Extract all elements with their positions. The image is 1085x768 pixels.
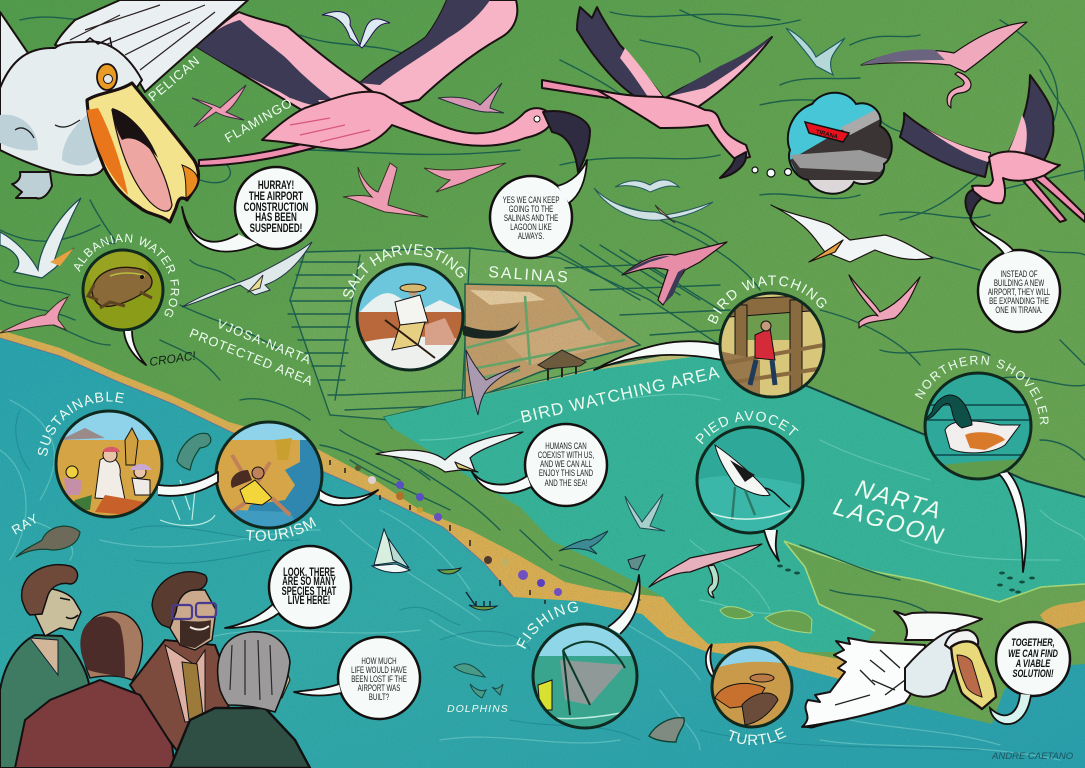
bubble: instead of xyxy=(970,218,1060,332)
frog circle xyxy=(82,248,164,332)
signature: ANDRE CAETANO xyxy=(991,751,1074,762)
label: salt harvesting: SALT HARVESTING xyxy=(343,244,466,298)
fishing circle xyxy=(530,620,640,731)
bubble: hurray: SUSPENDED! xyxy=(250,223,302,235)
label: dolphins: DOLPHINS xyxy=(447,703,509,715)
bubble: how much life: HOW MUCH xyxy=(361,656,397,666)
label: bird watching: BIRD WATCHING xyxy=(708,276,826,324)
tourism circle xyxy=(215,420,325,530)
tourism connector xyxy=(320,490,378,505)
flamingo right wing xyxy=(360,0,517,105)
man from behind xyxy=(15,612,175,768)
gull centre left xyxy=(182,242,312,307)
label: vjosa-narta protected area: VJOSA-NARTA xyxy=(215,316,314,368)
gull left xyxy=(0,198,81,278)
bubble: instead of: ONE IN TIRANA. xyxy=(995,305,1043,315)
label: croac: CROAC! xyxy=(148,349,197,369)
pelican crest xyxy=(85,38,112,48)
pied avocet circle xyxy=(695,425,805,535)
turtle circle xyxy=(710,645,795,730)
big flamingo xyxy=(197,0,590,172)
label: turtle: TURTLE xyxy=(730,727,786,745)
bubble: how much life: BUILT? xyxy=(369,692,390,702)
pink flamingo right lower xyxy=(849,275,920,328)
small blue gull xyxy=(786,28,845,75)
sailboat xyxy=(372,529,410,573)
bubble: how much life: BEEN LOST IF THE xyxy=(351,674,407,684)
frog speech tail xyxy=(124,331,146,365)
net near fishing xyxy=(628,555,645,570)
pelican feet xyxy=(12,172,52,198)
pelican body xyxy=(905,630,969,697)
blue bird xyxy=(559,531,608,554)
flamingo left wing xyxy=(197,12,395,120)
label: sustainable: SUSTAINABLE xyxy=(38,392,124,456)
right flamingo xyxy=(900,75,1085,222)
bubble: yes we can: SALINAS AND THE xyxy=(504,213,558,223)
bubble: hurray: HURRAY! xyxy=(258,180,294,192)
grey haired woman xyxy=(170,632,310,768)
northern shoveler circle xyxy=(925,373,1031,485)
salt harvesting circle xyxy=(355,262,465,372)
bird watching circle xyxy=(715,290,830,400)
jumping dolphin with splash xyxy=(160,433,215,525)
bubble: instead of: AIRPORT, THEY WILL xyxy=(988,287,1051,297)
bubble: hurray: CONSTRUCTION xyxy=(244,202,308,214)
bubble: look there are: ARE SO MANY xyxy=(282,576,336,589)
sea xyxy=(0,338,1085,768)
bubble: look there are: LOOK, THERE xyxy=(283,567,335,580)
label: northern shoveler: NORTHERN SHOVELER xyxy=(914,356,1048,425)
thought dots xyxy=(752,167,792,177)
bubble: humans can coexist xyxy=(472,424,607,506)
small pink flamingos xyxy=(0,83,506,333)
narta lagoon xyxy=(384,353,1085,652)
airport sign: TIRANA xyxy=(815,129,839,141)
sea ripples xyxy=(0,394,1085,760)
land contour lines xyxy=(0,10,1085,460)
ray xyxy=(16,526,80,557)
pelican head xyxy=(945,630,978,652)
pink flamingo top right xyxy=(861,22,1027,108)
lower pelican xyxy=(802,611,996,728)
bubble: humans can coexist: AND THE SEA! xyxy=(545,478,587,488)
glasses xyxy=(172,603,216,619)
salt fields xyxy=(288,245,730,420)
bubble: how much life: LIFE WOULD HAVE xyxy=(351,665,407,675)
light pelicans xyxy=(594,180,713,223)
salt shed xyxy=(538,350,586,388)
bubble: instead of: INSTEAD OF xyxy=(1000,269,1038,279)
people group xyxy=(0,565,310,768)
bubble: together: WE CAN FIND xyxy=(1008,646,1058,659)
dolphin group xyxy=(454,664,503,698)
causeway xyxy=(384,344,724,428)
bird watching connector xyxy=(594,341,722,370)
flamingo bill xyxy=(543,111,590,172)
shoveler speech tail xyxy=(999,472,1026,572)
sustainable circle xyxy=(55,410,165,520)
salinas flamingo xyxy=(466,350,520,415)
salt pans xyxy=(465,284,640,402)
label: narta lagoon: LAGOON xyxy=(830,493,948,551)
flying pelican over lagoon xyxy=(376,432,523,472)
white pelican centre right xyxy=(771,205,933,262)
flamingo legs xyxy=(199,140,320,166)
dark sea swirls xyxy=(16,410,980,750)
inner land lines xyxy=(320,430,940,620)
label: ray: RAY xyxy=(9,510,41,538)
fishing connector xyxy=(608,575,640,634)
label: vjosa-narta protected area: PROTECTED AREA xyxy=(187,325,316,389)
bubble: together: A VIABLE xyxy=(1015,656,1051,669)
gull over lagoon xyxy=(625,494,665,531)
pelican lower wing xyxy=(802,638,925,727)
bubble: hurray: HAS BEEN xyxy=(255,212,297,224)
pelican wings xyxy=(55,0,248,92)
bubble: hurray: THE AIRPORT xyxy=(249,191,303,203)
pelican bill xyxy=(951,641,996,709)
salt harvesting connector xyxy=(463,320,520,339)
bubble: together: TOGETHER, xyxy=(1011,635,1055,648)
bearded man xyxy=(130,572,232,768)
bubble: humans can coexist: AND WE CAN ALL xyxy=(540,459,592,469)
bubble: together: SOLUTION! xyxy=(1012,666,1054,679)
bubble: together xyxy=(990,622,1070,724)
label: albanian water frog: ALBANIAN WATER FROG xyxy=(74,234,180,318)
bubble: look there are: LIVE HERE! xyxy=(288,595,330,608)
bubble: humans can coexist: COEXIST WITH US, xyxy=(538,450,594,460)
beach strip xyxy=(0,330,1085,704)
bubble: yes we can: GOING TO THE xyxy=(509,204,553,214)
pelican eye xyxy=(97,64,117,90)
bubble: how much life xyxy=(294,637,420,719)
bubble: hurray xyxy=(182,167,317,252)
bubble: yes we can: LAGOON LIKE xyxy=(510,222,552,232)
label: salinas: SALINAS xyxy=(488,264,570,287)
pelican upper wing xyxy=(894,611,982,640)
thought cloud: tirana airport xyxy=(786,92,893,195)
label: pelican: PELICAN xyxy=(145,53,203,104)
bubble: yes we can: YES WE CAN KEEP xyxy=(503,195,559,205)
islands xyxy=(720,607,812,633)
label: bird watching area: BIRD WATCHING AREA xyxy=(519,362,722,427)
bubble: instead of: BUILDING A NEW xyxy=(994,278,1045,288)
bubble: yes we can xyxy=(490,160,587,258)
sustainable to tourism connector xyxy=(158,472,218,496)
blue-white seagull xyxy=(322,12,390,48)
label: flamingo: FLAMINGO xyxy=(222,95,295,146)
label: tourism: TOURISM xyxy=(246,517,316,541)
bubble: look there are: SPECIES THAT xyxy=(282,586,336,599)
flamingo under salinas xyxy=(622,242,727,305)
dolphin head xyxy=(649,718,684,742)
woman left xyxy=(0,565,90,768)
label: fishing: FISHING xyxy=(516,602,578,649)
big pelican xyxy=(0,0,248,222)
bubble: yes we can: ALWAYS. xyxy=(518,231,544,241)
avocet speech tail xyxy=(764,530,779,561)
lagoon shoreline xyxy=(802,384,1085,497)
flamingo body and neck xyxy=(262,92,552,150)
beach umbrellas and people xyxy=(330,460,562,604)
bubble: instead of: BE EXPANDING THE xyxy=(989,296,1049,306)
bubble: humans can coexist: HUMANS CAN xyxy=(545,441,587,451)
flamingo over lagoon xyxy=(649,544,762,598)
turtle connector xyxy=(706,644,716,680)
pelican bill xyxy=(87,83,198,222)
second flamingo xyxy=(542,7,772,178)
pelican body xyxy=(0,41,142,175)
bubble: how much life: AIRPORT WAS xyxy=(358,683,400,693)
bubble: look there are xyxy=(225,546,351,628)
label: narta lagoon: NARTA xyxy=(852,475,945,525)
fish schools xyxy=(777,564,1035,594)
kayaks xyxy=(438,568,497,610)
label: pied avocet: PIED AVOCET xyxy=(695,410,798,444)
bubble: humans can coexist: ENJOY THIS LAND xyxy=(539,468,593,478)
